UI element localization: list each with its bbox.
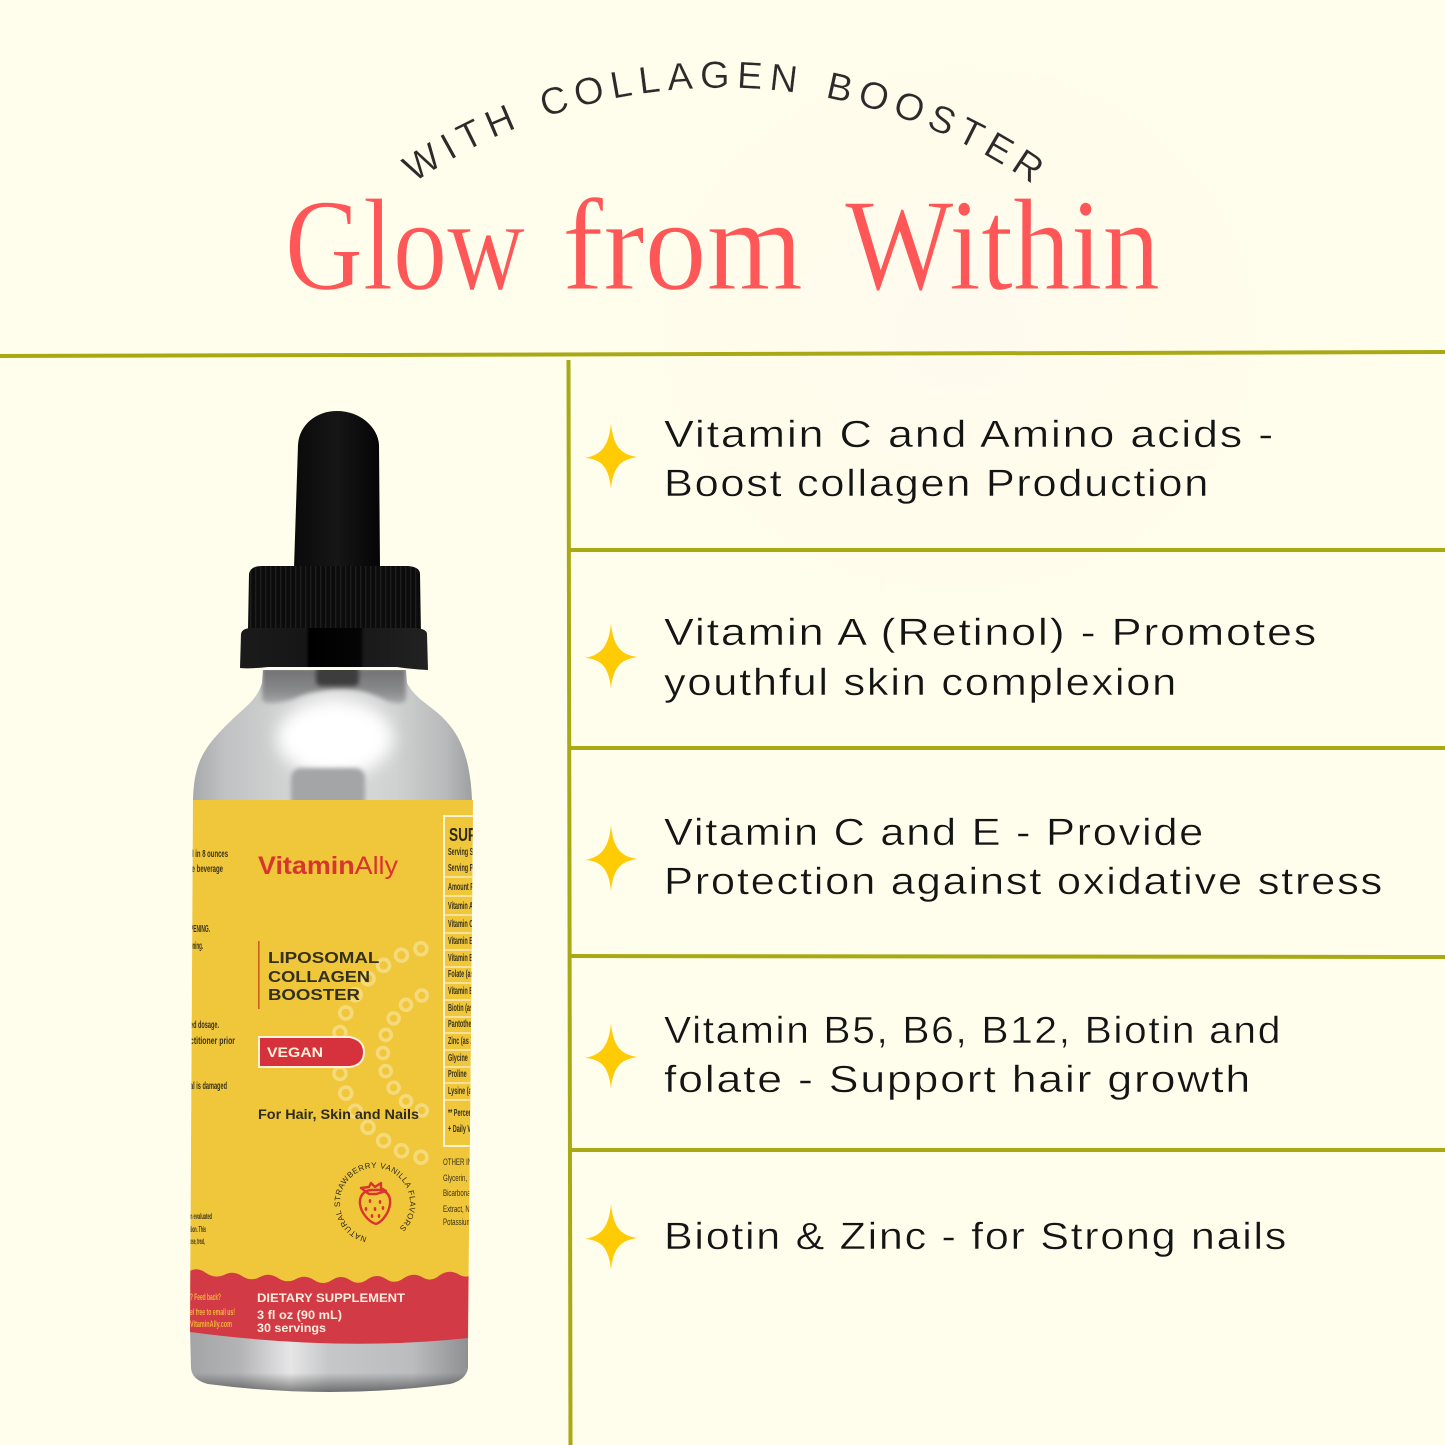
contact text: el free to email us! — [190, 1307, 235, 1318]
icon: sparkle — [585, 623, 638, 689]
icon: sparkle — [585, 423, 638, 489]
supplement facts panel: Glycine — [448, 1052, 468, 1063]
supplement details — [257, 1291, 406, 1335]
supplement facts panel: Vitamin E — [448, 935, 473, 946]
left directions text: tion. This — [190, 1225, 206, 1234]
benefit: b vitamins — [585, 1010, 1282, 1101]
product bottle — [190, 411, 473, 1392]
benefit: vitamin c and amino acids: Boost collagen Production — [664, 463, 1210, 505]
supplement facts panel: Pantothenic — [448, 1018, 480, 1029]
benefit: vitamin c and e: Vitamin C and E - Provide — [664, 812, 1205, 854]
supplement facts panel: SUP — [449, 825, 477, 845]
supplement facts panel: Biotin (as — [448, 1002, 473, 1013]
dropper bulb — [294, 411, 380, 568]
supplement facts panel: Folate (as — [448, 968, 474, 979]
red wave band — [190, 1269, 469, 1344]
supplement facts panel: Serving Per — [448, 862, 479, 873]
contact text — [190, 1292, 235, 1330]
other ingredients text: Bicarbonate, — [443, 1188, 477, 1198]
supplement details: 3 fl oz (90 mL) — [257, 1308, 342, 1322]
supplement details: 30 servings — [257, 1321, 326, 1335]
supplement facts panel: Zinc (as Zinc — [448, 1035, 482, 1046]
curved subtitle: WITH COLLAGEN BOOSTER — [400, 61, 1042, 184]
left directions text: n evaluated — [190, 1212, 212, 1221]
benefit: vitamin a — [585, 612, 1318, 704]
benefit: vitamin c and e: Protection against oxidative stress — [664, 861, 1384, 903]
contact text: VitaminAlly.com — [190, 1319, 232, 1330]
title: from — [562, 173, 803, 318]
supplement facts panel: + Daily Value — [448, 1123, 482, 1134]
icon: strawberry — [360, 1183, 390, 1224]
supplement facts panel — [443, 815, 473, 1147]
other ingredients text: Glycerin, Sun — [443, 1173, 480, 1183]
left directions text: PENING. — [190, 924, 210, 935]
supplement facts panel: Proline — [448, 1068, 467, 1079]
other ingredients text: Extract, Natu — [443, 1204, 478, 1214]
title: Glow — [285, 173, 525, 318]
supplement facts panel: Vitamin C — [448, 918, 473, 929]
left directions text: ed dosage. — [190, 1020, 219, 1031]
icon: sparkle — [585, 1023, 638, 1089]
contact text: ? Feed back? — [190, 1292, 221, 1303]
brand logo: Vitamin Ally — [258, 852, 399, 880]
benefit: vitamin a: youthful skin complexion — [664, 662, 1178, 704]
other ingredients text: OTHER INGR — [443, 1157, 482, 1167]
left directions text — [190, 849, 235, 1246]
supplement facts panel: Vitamin B12 — [448, 985, 480, 996]
vegan badge — [259, 1037, 364, 1067]
bottle label — [190, 800, 473, 1344]
left directions text: le beverage — [190, 864, 223, 875]
vegan badge: VEGAN — [267, 1045, 323, 1060]
title: Within — [845, 173, 1160, 318]
left directions text: ose, treat, — [190, 1237, 205, 1246]
benefit line: For Hair, Skin and Nails — [258, 1107, 419, 1122]
supplement facts panel: Vitamin A — [448, 900, 473, 911]
bottle base — [190, 1328, 468, 1392]
supplement facts panel: Vitamin B6 — [448, 952, 477, 963]
liposome ring graphic — [332, 942, 429, 1164]
product name — [258, 941, 383, 1009]
benefit: vitamin c and e — [585, 812, 1384, 903]
product name: BOOSTER — [268, 987, 360, 1004]
supplement facts panel: Serving Size — [448, 846, 481, 857]
benefit: vitamin a: Vitamin A (Retinol) - Promotes — [664, 612, 1318, 654]
benefit: vitamin c and amino acids: Vitamin C and Amino acids - — [664, 414, 1275, 456]
left directions text: ening. — [190, 941, 203, 952]
grid lines — [0, 352, 1445, 1445]
benefit: biotin and zinc — [585, 1204, 1288, 1270]
icon: sparkle — [585, 825, 638, 891]
supplement facts panel: ** Percent Daily — [448, 1107, 489, 1118]
left directions text: ctitioner prior — [190, 1036, 235, 1047]
benefit: vitamin c and amino acids — [585, 414, 1275, 505]
dropper collar — [240, 628, 428, 670]
supplement details: DIETARY SUPPLEMENT — [257, 1291, 406, 1305]
supplement facts panel: Amount Per — [448, 881, 480, 892]
benefit: b vitamins: Vitamin B5, B6, B12, Biotin and — [664, 1010, 1282, 1052]
left directions text: d in 8 ounces — [190, 849, 228, 860]
benefit: b vitamins: folate - Support hair growth — [664, 1059, 1252, 1101]
bottle shoulders — [193, 670, 472, 800]
dropper cap — [248, 566, 421, 630]
supplement facts panel: Lysine (as — [448, 1085, 475, 1096]
other ingredients text: Potassium So — [443, 1217, 481, 1227]
benefit: biotin and zinc: Biotin & Zinc - for Strong nails — [664, 1216, 1288, 1258]
flavor badge: NATURAL STRAWBERRY VANILLA FLAVORS — [334, 1162, 416, 1242]
icon: sparkle — [585, 1204, 638, 1270]
other ingredients text — [443, 1158, 470, 1225]
left directions text: al is damaged — [190, 1081, 227, 1092]
label yellow field — [188, 800, 476, 1290]
product name: COLLAGEN — [268, 969, 370, 986]
title — [285, 173, 1160, 318]
product name: LIPOSOMAL — [268, 950, 379, 967]
